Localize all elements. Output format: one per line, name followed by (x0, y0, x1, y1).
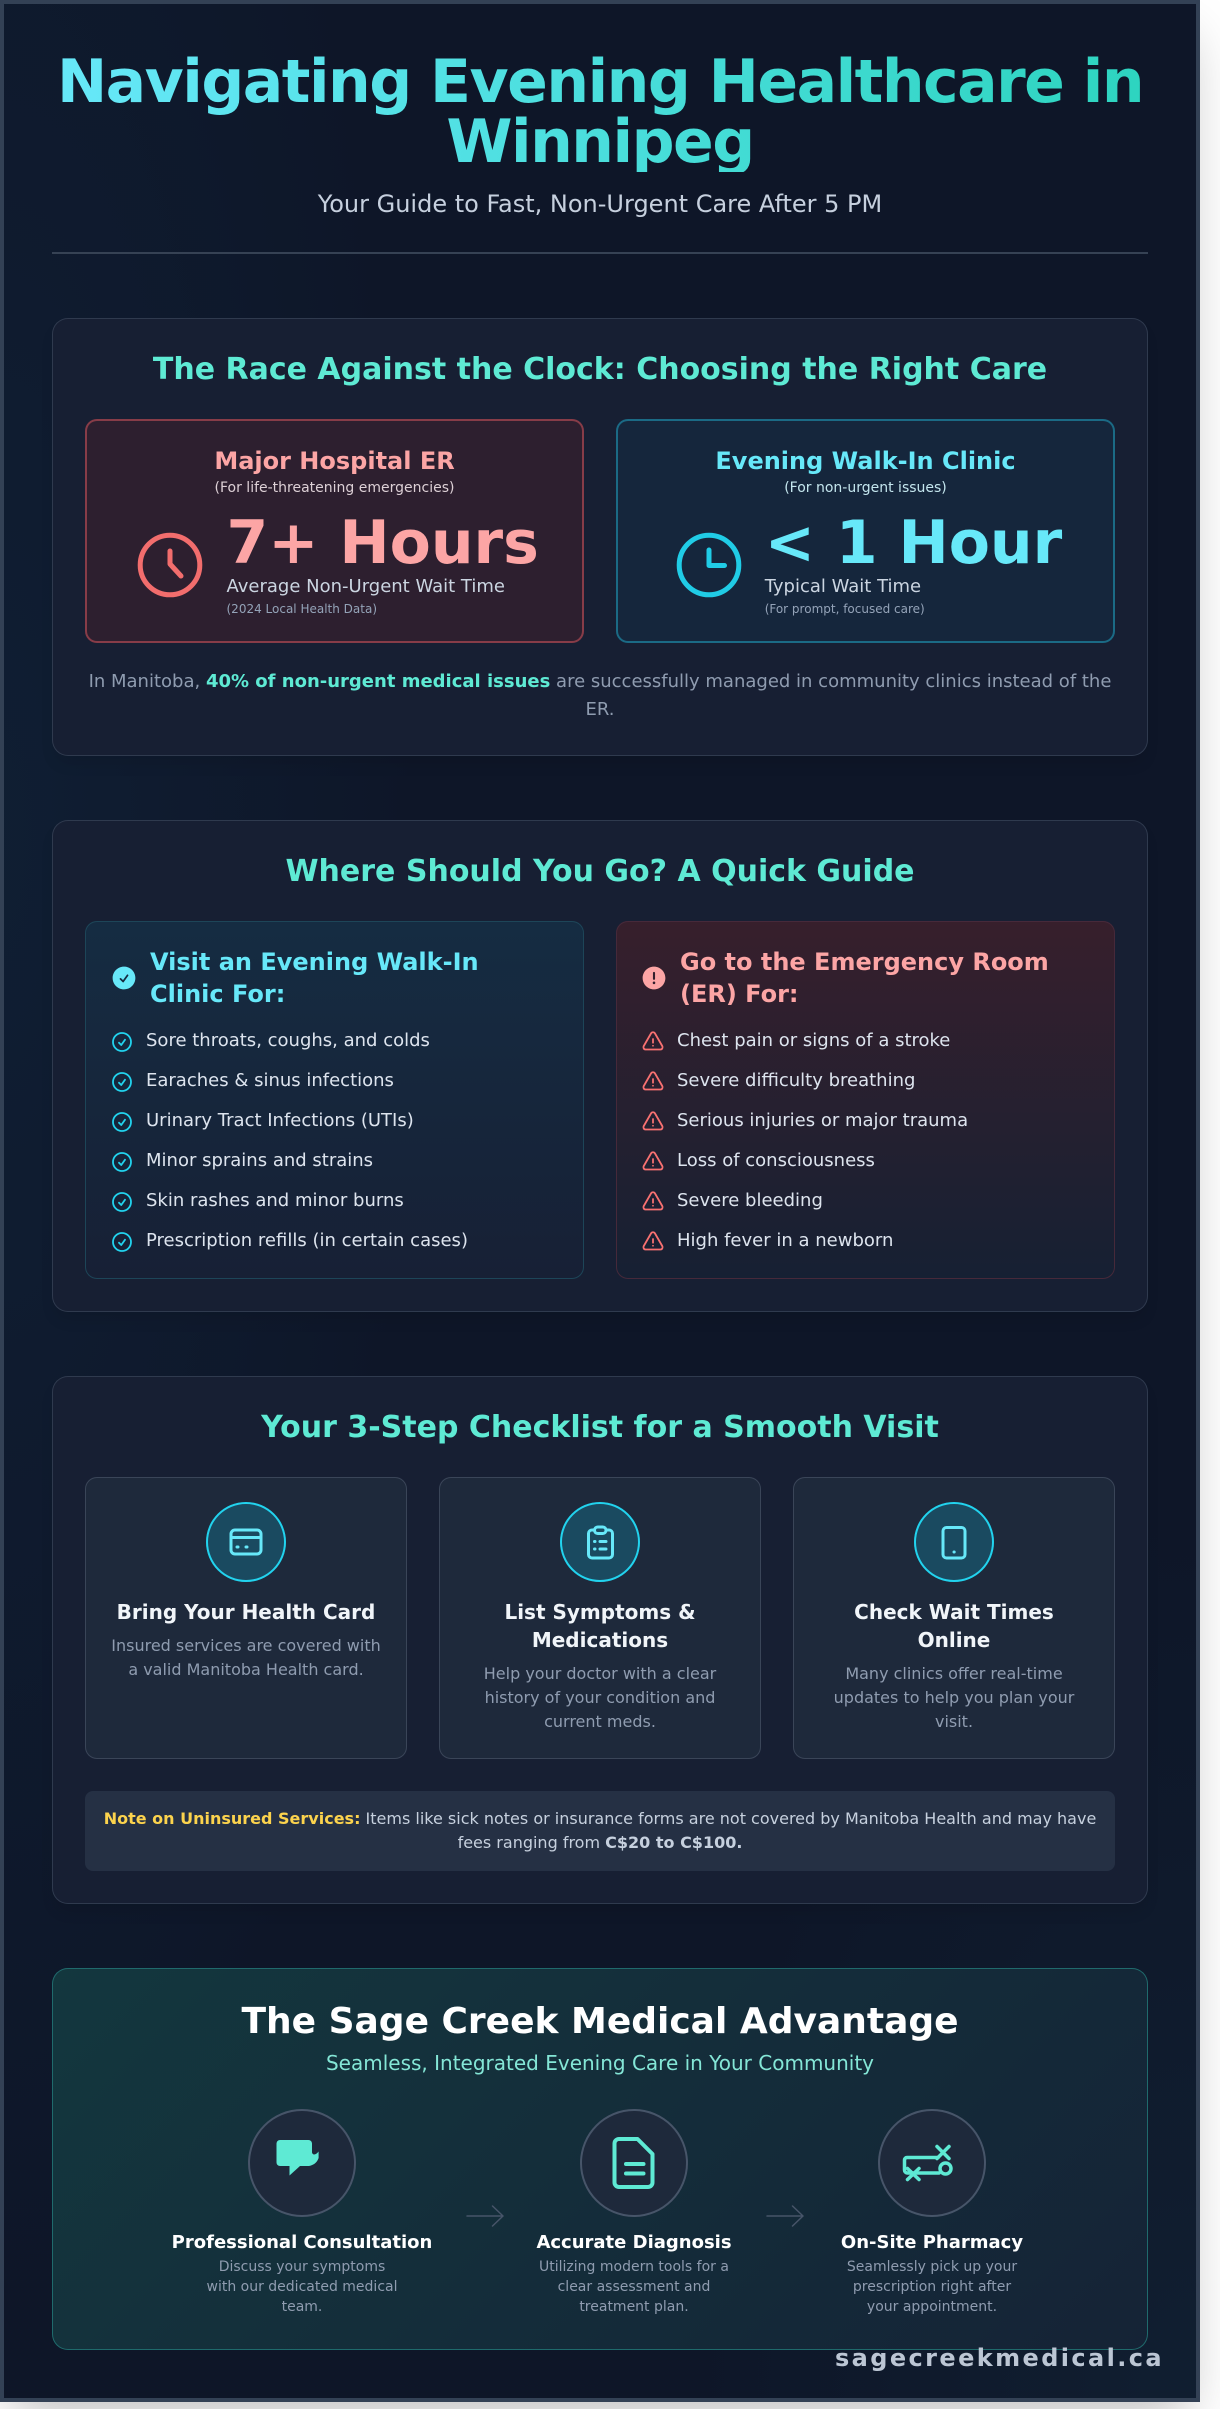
ER list heading: (ER) For: (680, 980, 799, 1008)
step heading (504, 1600, 696, 1652)
callout text (104, 1809, 1096, 1852)
step heading: List Symptoms & (504, 1600, 696, 1624)
heading: race against the clock: The Race Against the Clock: Choosing the Right Care (153, 352, 1047, 387)
step description: team. (282, 2299, 322, 2315)
clinic wait label: Typical Wait Time (765, 576, 921, 597)
icon: document (580, 2109, 688, 2217)
item: breathing: Severe difficulty breathing (677, 1070, 915, 1091)
step card: symptoms (439, 1477, 761, 1759)
step description (834, 1664, 1074, 1731)
step card: wait times (793, 1477, 1115, 1759)
step description: Seamlessly pick up your (847, 2259, 1017, 2275)
step heading (854, 1600, 1054, 1652)
ER list heading (680, 948, 1049, 1008)
item: chest pain: Chest pain or signs of a stroke (677, 1030, 950, 1051)
step description: visit. (935, 1712, 973, 1731)
panel: 3-step checklist (52, 1376, 1148, 1904)
icon: chat bubble (248, 2109, 356, 2217)
callout text: Note on Uninsured Services: Items like sick notes or insurance forms are not covered by Manitoba Health and may have (104, 1809, 1096, 1828)
title: Winnipeg (446, 107, 754, 177)
panel: sage creek medical advantage (52, 1968, 1148, 2350)
clinic note: (For prompt, focused care) (765, 602, 925, 616)
step description: with our dedicated medical (206, 2279, 397, 2295)
ER data note: (2024 Local Health Data) (226, 602, 377, 616)
step card: health card (85, 1477, 407, 1759)
item: sore throats: Sore throats, coughs, and colds (146, 1030, 430, 1051)
step description: Many clinics offer real-time (845, 1664, 1063, 1683)
icon: clipboard (560, 1502, 640, 1582)
clinic card subtitle: (For non-urgent issues) (784, 480, 947, 496)
step description: treatment plan. (579, 2299, 689, 2315)
card: evening walk-in clinic (616, 419, 1115, 643)
panel: quick guide (52, 820, 1148, 1312)
step description: history of your condition and (485, 1688, 715, 1707)
item: refills: Prescription refills (in certain cases) (146, 1230, 468, 1251)
step description: a valid Manitoba Health card. (128, 1660, 364, 1679)
card: major hospital ER (85, 419, 584, 643)
step description (484, 1664, 716, 1731)
step description: Help your doctor with a clear (484, 1664, 716, 1683)
step description: prescription right after (853, 2279, 1011, 2295)
step description (847, 2259, 1018, 2315)
step heading: Bring Your Health Card (117, 1600, 375, 1624)
clinic list heading: Visit an Evening Walk-In (150, 948, 479, 976)
item: newborn fever: High fever in a newborn (677, 1230, 893, 1251)
icon: smartphone (914, 1502, 994, 1582)
item: injuries: Serious injuries or major trauma (677, 1110, 968, 1131)
arrow: consultation to diagnosis (466, 2205, 504, 2227)
clinic list heading (150, 948, 479, 1008)
item: UTIs: Urinary Tract Infections (UTIs) (146, 1110, 414, 1131)
callout text: fees ranging from C$20 to C$100. (458, 1833, 742, 1852)
step: accurate diagnosis (536, 2109, 732, 2315)
clinic wait time: < 1 Hour (765, 508, 1062, 578)
icon: red clock (138, 532, 202, 598)
title: Navigating Evening Healthcare in (57, 47, 1143, 117)
icon: prescription (878, 2109, 986, 2217)
item: earaches: Earaches & sinus infections (146, 1070, 394, 1091)
callout: uninsured services (85, 1791, 1115, 1871)
arrow: diagnosis to pharmacy (766, 2205, 804, 2227)
clinic list heading: Clinic For: (150, 980, 285, 1008)
card: walk-in clinic list (85, 921, 584, 1279)
subheading: advantage: Seamless, Integrated Evening Care in Your Community (326, 2051, 874, 2075)
ER wait time: 7+ Hours (226, 508, 539, 578)
icon: solid check (112, 966, 136, 990)
step description (111, 1636, 381, 1679)
website watermark: sagecreekmedical.ca (835, 2344, 1164, 2372)
step: on-site pharmacy (841, 2109, 1023, 2315)
item: rashes: Skin rashes and minor burns (146, 1190, 404, 1211)
clinic card title: Evening Walk-In Clinic (715, 447, 1016, 475)
step heading: On-Site Pharmacy (841, 2232, 1023, 2253)
ER wait label: Average Non-Urgent Wait Time (226, 576, 505, 597)
step description: Insured services are covered with (111, 1636, 381, 1655)
icon: health card (206, 1502, 286, 1582)
item: consciousness: Loss of consciousness (677, 1150, 875, 1171)
heading: quick guide: Where Should You Go? A Quick Guide (285, 854, 915, 889)
card: emergency room list (616, 921, 1115, 1279)
ER card title: Major Hospital ER (214, 447, 455, 475)
step description: your appointment. (867, 2299, 997, 2315)
step heading: Online (918, 1628, 990, 1652)
step heading: Check Wait Times (854, 1600, 1054, 1624)
manitoba statistic note (89, 671, 1111, 720)
step description (206, 2259, 397, 2315)
title (52, 52, 1148, 172)
step description: current meds. (544, 1712, 656, 1731)
ER card subtitle: (For life-threatening emergencies) (215, 480, 454, 496)
step heading: Professional Consultation (172, 2232, 432, 2253)
subtitle: Your Guide to Fast, Non-Urgent Care After 5 PM (318, 190, 882, 218)
manitoba statistic note: In Manitoba, 40% of non-urgent medical issues are successfully managed in community clinics instead of the (89, 671, 1111, 692)
heading: advantage: The Sage Creek Medical Advantage (241, 2001, 959, 2042)
step: professional consultation (172, 2109, 432, 2315)
step description: clear assessment and (558, 2279, 710, 2295)
step description: Discuss your symptoms (219, 2259, 385, 2275)
ER list heading: Go to the Emergency Room (680, 948, 1049, 976)
icon: solid exclamation (642, 966, 666, 990)
step description (539, 2259, 729, 2315)
step description: Utilizing modern tools for a (539, 2259, 729, 2275)
panel: race against the clock (52, 318, 1148, 756)
step heading: Accurate Diagnosis (536, 2232, 732, 2253)
manitoba statistic note: ER. (586, 699, 614, 720)
item: sprains: Minor sprains and strains (146, 1150, 373, 1171)
heading: checklist: Your 3-Step Checklist for a Smooth Visit (261, 1410, 939, 1445)
item: bleeding: Severe bleeding (677, 1190, 823, 1211)
step description: updates to help you plan your (834, 1688, 1074, 1707)
step heading: Medications (532, 1628, 668, 1652)
icon: cyan clock (676, 532, 742, 598)
